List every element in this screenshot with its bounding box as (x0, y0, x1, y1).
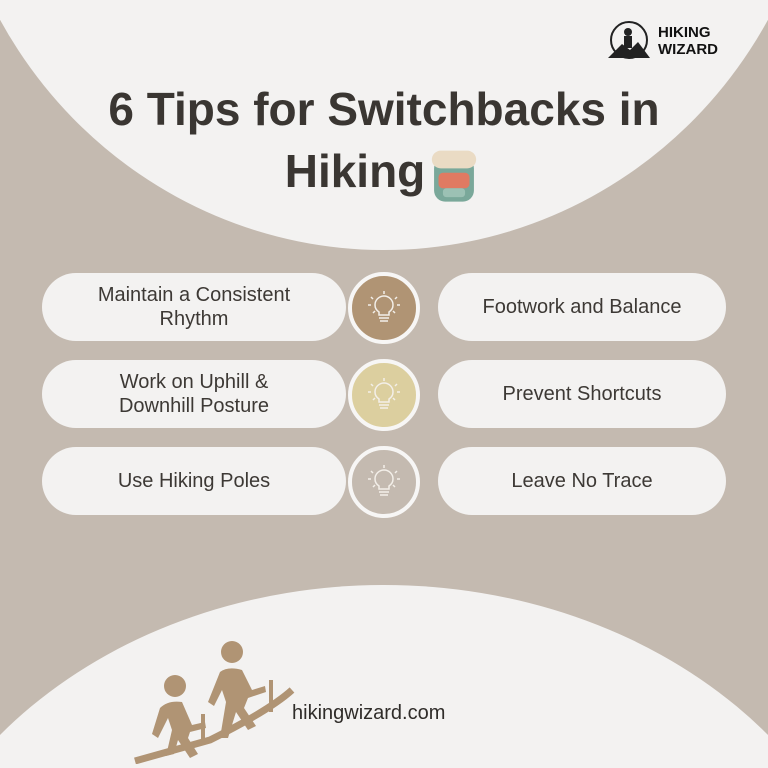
pill: Leave No Trace: Leave No Trace (511, 470, 653, 492)
icon: bulb 2 (348, 359, 420, 431)
pill: Prevent Shortcuts: Prevent Shortcuts (503, 383, 661, 405)
icon: hikers (134, 641, 294, 764)
title: Hiking (285, 145, 425, 197)
logo: WIZARD (658, 41, 718, 58)
logo: HIKING (658, 24, 710, 41)
pill: Maintain a Consistent Rhythm (42, 273, 346, 341)
pill: Work on Uphill & Downhill Posture: Downhill Posture (119, 395, 269, 417)
title: 6 Tips for Switchbacks in (108, 83, 660, 135)
pill: Leave No Trace (438, 447, 726, 515)
title (108, 83, 660, 202)
pill: Work on Uphill & Downhill Posture (42, 360, 346, 428)
pill: Maintain a Consistent Rhythm: Rhythm (160, 308, 228, 330)
logo (608, 21, 718, 59)
icon: bulb 3 (348, 446, 420, 518)
pill: Use Hiking Poles: Use Hiking Poles (118, 470, 270, 492)
pill: Footwork and Balance (438, 273, 726, 341)
footer url: hikingwizard.com (292, 702, 445, 724)
pill: Footwork and Balance: Footwork and Balance (482, 296, 682, 318)
pill: Maintain a Consistent Rhythm: Maintain a Consistent (98, 284, 290, 306)
pill: Use Hiking Poles (42, 447, 346, 515)
pill: Prevent Shortcuts (438, 360, 726, 428)
icon: bulb 1 (348, 272, 420, 344)
pill: Work on Uphill & Downhill Posture: Work on Uphill & (120, 371, 268, 393)
